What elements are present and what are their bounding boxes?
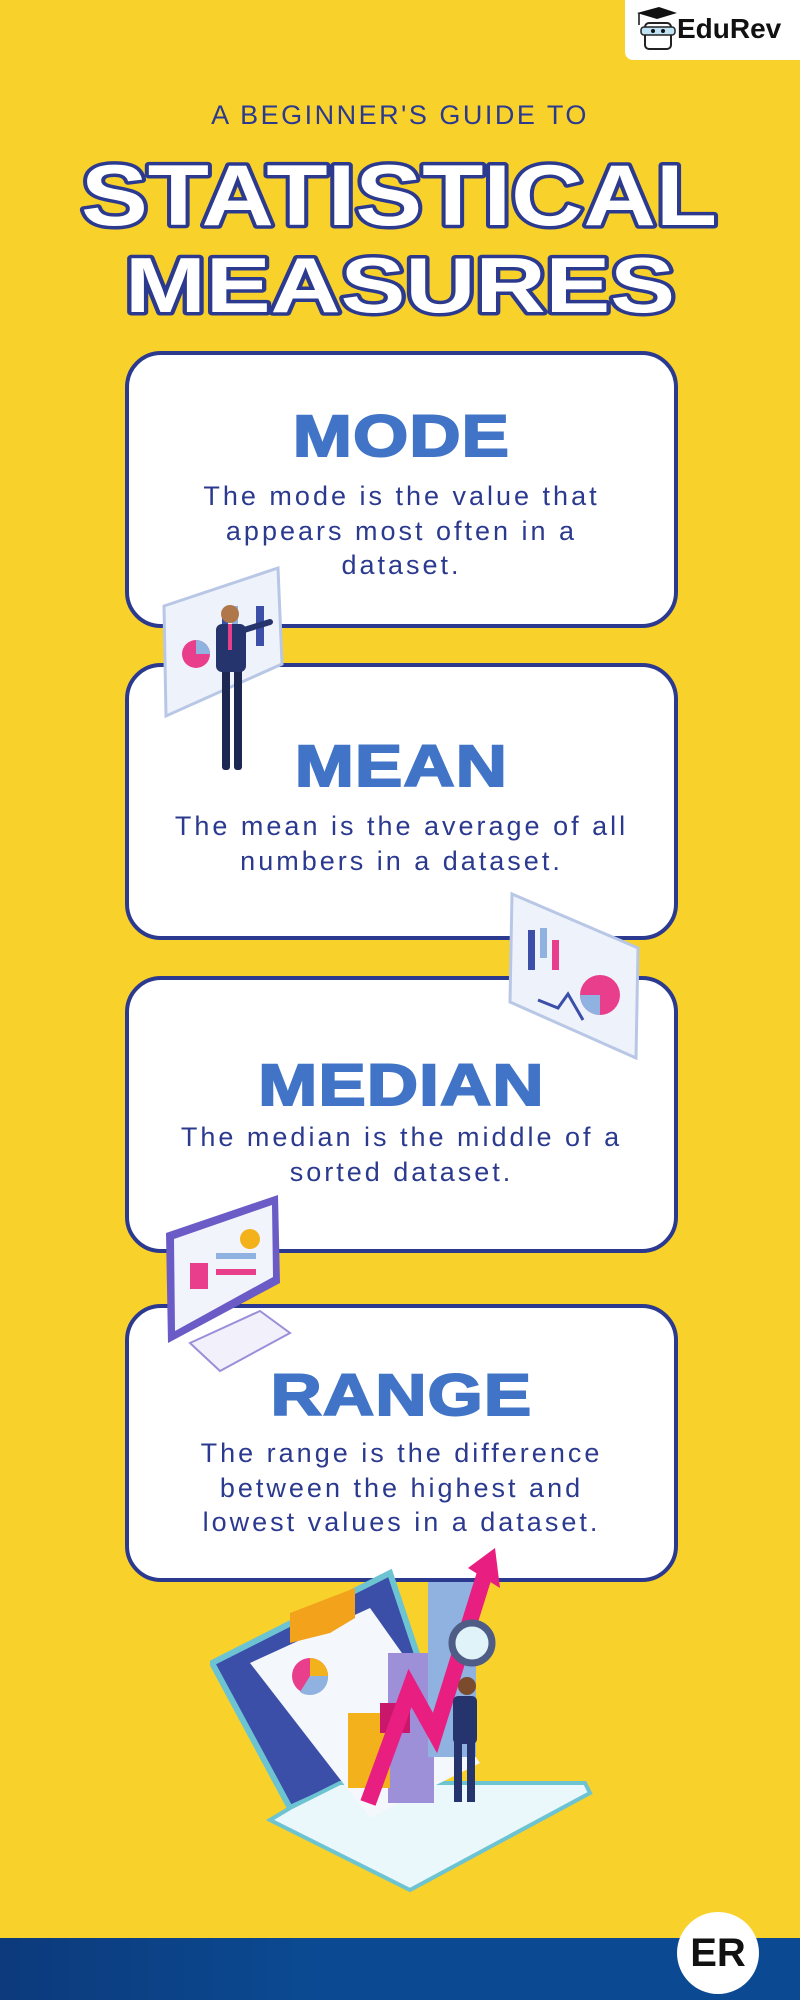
text: mean: numbers in a dataset. xyxy=(240,846,563,876)
logo: EduRev xyxy=(625,0,800,60)
heading: mean: MEAN xyxy=(295,734,508,799)
text: range: lowest values in a dataset. xyxy=(203,1507,600,1537)
subtitle: A BEGINNER'S GUIDE TO xyxy=(211,100,589,130)
heading: median: MEDIAN xyxy=(258,1053,545,1118)
text: mode: appears most often in a xyxy=(226,516,577,546)
text: mode xyxy=(203,481,600,580)
footer band xyxy=(0,1938,800,2000)
logo: ER: ER xyxy=(690,1931,746,1975)
heading: range: RANGE xyxy=(271,1363,532,1428)
text: range xyxy=(201,1438,602,1537)
text: mean: The mean is the average of all xyxy=(175,811,628,841)
panel: mean xyxy=(125,663,678,940)
title: MEASURES xyxy=(125,241,675,329)
text: median: The median is the middle of a xyxy=(181,1122,622,1152)
text: mode: dataset. xyxy=(341,550,462,580)
text: median xyxy=(181,1122,622,1186)
title xyxy=(80,148,718,329)
heading: mode: MODE xyxy=(293,404,510,469)
panel: mode xyxy=(125,351,678,628)
icon: chart panel xyxy=(508,892,640,1060)
text: range: The range is the difference xyxy=(201,1438,602,1468)
text: median: sorted dataset. xyxy=(290,1156,513,1186)
illustration: laptop with charts and man xyxy=(210,1548,593,1892)
icon: businessman with chart board xyxy=(162,566,284,770)
logo: EduRev: EduRev xyxy=(677,13,781,44)
text: mean xyxy=(175,811,628,876)
text: range: between the highest and xyxy=(220,1472,583,1502)
icon: computer monitor xyxy=(166,1195,292,1372)
text: mode: The mode is the value that xyxy=(203,481,600,511)
panel: median xyxy=(125,976,678,1253)
panel: range xyxy=(125,1304,678,1582)
title: STATISTICAL xyxy=(81,148,717,244)
logo: ER xyxy=(677,1912,759,1994)
